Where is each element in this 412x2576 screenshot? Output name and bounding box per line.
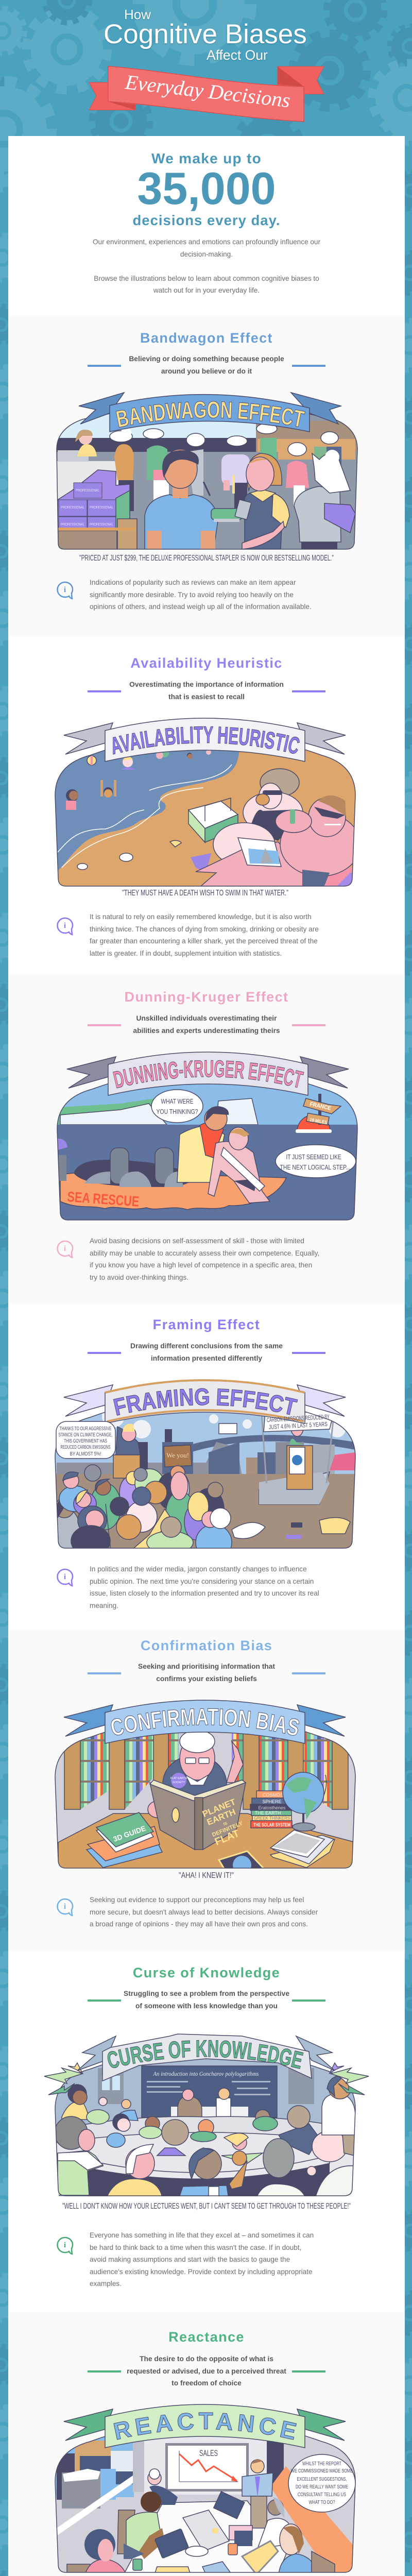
- illustration: shop with sheep customers: [56, 392, 358, 563]
- speech bubble: politician claim: REDUCED CARBON EMISSIONS: [61, 1445, 111, 1450]
- illustration: sea rescue of swimmer: 19 MILES: [310, 1117, 328, 1125]
- caption: "THEY MUST HAVE A DEATH WISH TO SWIM IN THAT WATER.": [122, 889, 288, 897]
- info text: avoid making assumptions and start with the basics to gauge the: [90, 2256, 290, 2263]
- illustration: library and flat earth book: IS: [222, 1821, 228, 1827]
- text: intro paragraphs: Browse the illustrations below to learn about common cognitive biases to: [94, 274, 319, 282]
- illustration: boardroom with falling sales chart: [55, 2404, 356, 2573]
- info text: significantly more desirable. Try to avoid relying too heavily on the: [90, 591, 294, 599]
- speech bubble: WE COMMISSIONED MADE SOME: [291, 2468, 353, 2474]
- title: How Cognitive Biases Affect Our: [104, 7, 307, 63]
- illustration: library and flat earth book: 3D GUIDE: [112, 1824, 147, 1843]
- ribbon: Everyday Decisions: [89, 66, 324, 122]
- speech bubble: politician claim: BY ALMOST 5%!: [70, 1451, 101, 1457]
- illustration: library and flat earth book: Eratosthenes: [258, 1805, 286, 1810]
- info text: public opinion. The next time you're considering your stance on a certain: [90, 1578, 314, 1585]
- divider right: [292, 1999, 325, 2002]
- info text: Everyone has something in life that they excel at – and sometimes it can: [90, 2231, 314, 2239]
- illustration: politician rally and pollution: We you!: [166, 1451, 189, 1459]
- illustration: library and flat earth book: THE EARTH: [255, 1810, 281, 1816]
- illustration: library and flat earth book: SPHERE: [262, 1799, 282, 1804]
- icon: info bubble: i: [64, 922, 66, 930]
- info text: [90, 1237, 319, 1281]
- icon: info bubble: i: [64, 2241, 66, 2249]
- definition: of someone with less knowledge than you: [135, 2002, 278, 2010]
- info text: examples.: [90, 2280, 122, 2287]
- info text: a broad range of opinions - they may all have their own pros and cons.: [90, 1920, 308, 1928]
- heading: Framing Effect: [153, 1317, 260, 1332]
- illustration: lecture hall with restless kids: [44, 2033, 369, 2211]
- divider left: [88, 1024, 121, 1026]
- info text: if you know you have a high level of competence in a specific area, then: [90, 1261, 312, 1269]
- info text: In politics and the wider media, jargon constantly changes to influence: [90, 1565, 307, 1573]
- illustration: sea rescue of swimmer: FRANCE: [309, 1101, 332, 1112]
- divider left: [88, 690, 121, 692]
- panel: Confirmation Bias: [8, 1630, 405, 1952]
- heading: 35,000 decisions every day: decisions every day.: [133, 212, 280, 228]
- info text: audience's existing knowledge. Provide context by including appropriate: [90, 2268, 313, 2276]
- info text: Indications of popularity such as reviews can make an item appear: [90, 579, 296, 586]
- panel: Dunning-Kruger Effect: [8, 974, 405, 1304]
- icon: info bubble: [57, 1241, 73, 1259]
- speech bubble: politician claim: [56, 1421, 115, 1459]
- speech bubble: next logical step: IT JUST SEEMED LIKE: [286, 1153, 341, 1161]
- icon: info bubble: [57, 917, 73, 936]
- illustration: library and flat earth book: FLAT EARTH: [170, 1777, 187, 1780]
- illustration: boardroom with falling sales chart: REACTANCE: [113, 2412, 297, 2440]
- speech bubble: politician claim: THIS GOVERNMENT HAS: [64, 1438, 107, 1444]
- definition: [127, 2355, 286, 2387]
- divider left: [88, 1352, 121, 1354]
- illustration: library and flat earth book: PLANET: [201, 1797, 237, 1819]
- divider right: [292, 2370, 325, 2372]
- illustration: shop with sheep customers: PROFESSIONAL: [61, 506, 84, 510]
- banner: carbon emissions: [267, 1413, 330, 1431]
- info text: thinking twice. The chances of dying from smoking, drinking or obesity are: [90, 925, 319, 933]
- panel: Framing Effect: [8, 1304, 405, 1630]
- heading: 35,000 decisions every day: We make up to: [151, 150, 262, 166]
- speech bubble: CONSULTANT TELLING US: [298, 2492, 346, 2498]
- illustration: library and flat earth book: DEFINITELY: [211, 1820, 244, 1838]
- panel: Reactance: [8, 2312, 405, 2576]
- speech bubble: what were you thinking: WHAT WERE: [161, 1097, 194, 1105]
- heading: 35,000 decisions every day: 35,000: [137, 163, 276, 214]
- definition: [129, 681, 284, 701]
- divider left: [88, 1672, 121, 1674]
- illustration: politician rally and pollution: [55, 1379, 356, 1549]
- heading: Dunning-Kruger Effect: [125, 989, 288, 1005]
- definition: information presented differently: [151, 1354, 262, 1362]
- info text: ability may be unable to accurately assess their own competence. Equally,: [90, 1249, 319, 1257]
- definition: Overestimating the importance of information: [129, 681, 284, 688]
- definition: The desire to do the opposite of what is: [140, 2355, 273, 2363]
- info text: [90, 579, 312, 611]
- definition: that is easiest to recall: [168, 693, 245, 701]
- info text: meaning.: [90, 1602, 118, 1609]
- info text: It is natural to rely on easily remembered knowledge, but it is also worth: [90, 913, 312, 921]
- definition: to freedom of choice: [171, 2379, 242, 2387]
- icon: info bubble: [57, 1898, 73, 1917]
- illustration: shop with sheep customers: PROFESSIONAL: [76, 489, 99, 493]
- illustration: lecture hall with restless kids: An introduction into Goncharov polylogarithms: [153, 2070, 259, 2077]
- info text: more secure, but doesn't always lead to better decisions. Always consider: [90, 1908, 318, 1916]
- heading: Confirmation Bias: [141, 1638, 272, 1653]
- illustration: sea rescue of swimmer: [57, 1052, 358, 1221]
- banner: carbon emissions: JUST 4.6% IN LAST 5 YEARS: [269, 1420, 328, 1431]
- panel: Curse of Knowledge: [8, 1952, 405, 2312]
- divider right: [292, 1024, 325, 1026]
- speech bubble: EXCELLENT SUGGESTIONS,: [297, 2476, 347, 2482]
- info text: [90, 1896, 318, 1928]
- illustration: shop with sheep customers: PROFESSIONAL: [90, 506, 113, 510]
- icon: info bubble: [57, 581, 73, 600]
- text: intro paragraphs: decision-making.: [180, 250, 233, 258]
- info text: [90, 1565, 319, 1609]
- text: intro paragraphs: Our environment, experiences and emotions can profoundly influence our: [93, 238, 320, 246]
- divider right: [292, 365, 325, 367]
- speech bubble: politician claim: STANCE ON CLIMATE CHANGE,: [59, 1432, 112, 1438]
- heading: Bandwagon Effect: [140, 330, 273, 346]
- title: How Cognitive Biases Affect Our: How: [124, 7, 151, 22]
- definition: Unskilled individuals overestimating their: [136, 1014, 277, 1022]
- icon: info bubble: i: [64, 1245, 66, 1253]
- text: intro paragraphs: watch out for in your everyday life.: [153, 286, 260, 294]
- icon: info bubble: i: [64, 1573, 66, 1581]
- speech bubble: politician claim: THANKS TO OUR AGGRESSIVE: [60, 1426, 112, 1432]
- illustration: beach and shark newspaper: AVAILABILITY HEURISTIC: [113, 726, 300, 755]
- title: How Cognitive Biases Affect Our: Affect Our: [207, 47, 268, 63]
- heading: Curse of Knowledge: [133, 1965, 280, 1980]
- speech bubble: WHAT TO DO?: [309, 2499, 335, 2505]
- illustration: shop with sheep customers: PROFESSIONAL: [90, 523, 113, 527]
- caption: "AHA! I KNEW IT!": [179, 1871, 234, 1880]
- definition: Seeking and prioritising information that: [138, 1663, 275, 1670]
- illustration: sea rescue of swimmer: SEA RESCUE: [67, 1189, 140, 1210]
- definition: Believing or doing something because people: [129, 355, 284, 363]
- panel: Bandwagon Effect: [8, 316, 405, 635]
- info text: issue, listen closely to the information presented and try to uncover its real: [90, 1589, 319, 1597]
- illustration: library and flat earth book: THE SOLAR SYSTEM: [253, 1822, 290, 1827]
- definition: Drawing different conclusions from the same: [130, 1342, 283, 1350]
- title: How Cognitive Biases Affect Our: Cognitive Biases: [104, 19, 307, 49]
- info text: try to avoid over-thinking things.: [90, 1274, 188, 1281]
- info text: [90, 2231, 314, 2287]
- definition: around you believe or do it: [161, 367, 252, 375]
- text: intro paragraphs: [93, 238, 320, 294]
- icon: info bubble: i: [64, 586, 66, 594]
- divider right: [292, 1672, 325, 1674]
- info text: Seeking out evidence to support our preconceptions may help us feel: [90, 1896, 304, 1904]
- panel: intro: [8, 136, 405, 316]
- divider left: [88, 2370, 121, 2372]
- speech bubble: [288, 2454, 355, 2512]
- banner: carbon emissions: CARBON EMISSIONS REDUCED BY: [267, 1413, 330, 1423]
- illustration: shop with sheep customers: PROFESSIONAL: [61, 523, 84, 527]
- heading: Reactance: [168, 2329, 245, 2345]
- definition: [130, 1342, 283, 1362]
- illustration: library and flat earth book: CONFIRMATION BIAS: [111, 1708, 300, 1736]
- info text: far greater than encountering a killer shark, yet the perceived threat of the: [90, 937, 318, 945]
- definition: [129, 355, 284, 375]
- definition: [133, 1014, 280, 1035]
- info text: opinions of others, and instead weigh up all of the information available.: [90, 603, 312, 611]
- illustration: lecture hall with restless kids: CURSE OF KNOWLEDGE: [107, 2040, 304, 2069]
- info text: be hard to think back to a time when this wasn't the case. If in doubt,: [90, 2244, 301, 2251]
- definition: requested or advised, due to a perceived threat: [127, 2367, 286, 2375]
- divider right: [292, 1352, 325, 1354]
- icon: info bubble: [57, 2237, 73, 2255]
- speech bubble: DO WE REALLY WANT SOME: [296, 2484, 348, 2490]
- divider left: [88, 1999, 121, 2002]
- heading: Availability Heuristic: [130, 655, 283, 671]
- definition: [124, 1990, 289, 2010]
- illustration: library and flat earth book: SOCIETY: [173, 1781, 185, 1784]
- illustration: shop with sheep customers: BANDWAGON EFFECT: [115, 401, 305, 428]
- illustration: boardroom with falling sales chart: SALES: [199, 2448, 218, 2458]
- illustration: library and flat earth book: COSMOS: [263, 1792, 283, 1798]
- illustration: library and flat earth book: [55, 1700, 356, 1880]
- info text: latter is greater. If in doubt, supplement intuition with statistics.: [90, 950, 282, 957]
- illustration: library and flat earth book: FLAT: [213, 1828, 241, 1848]
- icon: info bubble: i: [64, 1903, 66, 1911]
- definition: abilities and experts underestimating theirs: [133, 1027, 280, 1035]
- illustration: beach and shark newspaper: [55, 718, 356, 897]
- speech bubble: next logical step: THE NEXT LOGICAL STEP...: [280, 1163, 350, 1171]
- speech bubble: what were you thinking: [151, 1090, 203, 1123]
- info text: [90, 913, 319, 957]
- ribbon: Everyday Decisions: Everyday Decisions: [124, 70, 291, 112]
- icon: info bubble: [57, 1568, 73, 1587]
- info text: Avoid basing decisions on self-assessment of skill - those with limited: [90, 1237, 304, 1245]
- speech bubble: what were you thinking: YOU THINKING?: [157, 1108, 198, 1115]
- speech bubble: WHILST THE REPORT: [302, 2461, 341, 2467]
- divider right: [292, 690, 325, 692]
- illustration: library and flat earth book: EARTH: [205, 1807, 237, 1827]
- heading: 35,000 decisions every day: [133, 150, 280, 228]
- definition: Struggling to see a problem from the perspective: [124, 1990, 289, 1997]
- divider left: [88, 365, 121, 367]
- panel: Availability Heuristic: [8, 635, 405, 974]
- illustration: politician rally and pollution: FRAMING EFFECT: [113, 1388, 298, 1416]
- illustration: library and flat earth book: GREEK THINKERS: [254, 1816, 290, 1821]
- definition: confirms your existing beliefs: [156, 1675, 257, 1683]
- definition: [138, 1663, 275, 1683]
- speech bubble: next logical step: [276, 1145, 356, 1178]
- illustration: sea rescue of swimmer: DUNNING-KRUGER EFFECT: [113, 1060, 304, 1088]
